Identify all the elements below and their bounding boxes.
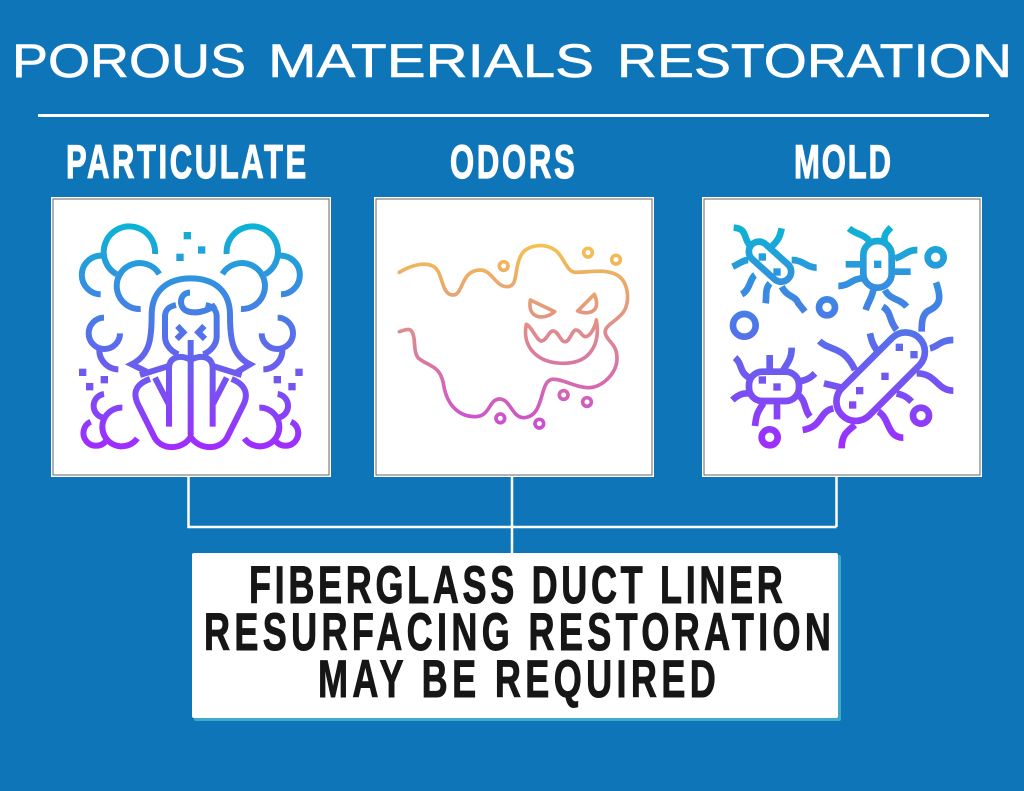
title: RESTORATION: [617, 34, 1012, 87]
callout text: RESURFACING RESTORATION: [204, 602, 831, 662]
icon: person in dust clouds: [79, 226, 303, 447]
callout text: MAY BE REQUIRED: [318, 649, 716, 709]
icon: mold bacteria: [732, 227, 953, 448]
callout text: [204, 555, 831, 709]
heading: odors: ODORS: [450, 137, 575, 189]
panel: particulate: [51, 197, 331, 477]
panel: mold: [702, 197, 982, 477]
panel: odors: [374, 197, 654, 477]
title: POROUS: [12, 34, 246, 87]
icon: odor cloud with face: [399, 246, 628, 428]
callout: fiberglass duct liner: [192, 553, 841, 721]
heading: particulate: PARTICULATE: [66, 137, 306, 189]
callout text: FIBERGLASS DUCT LINER: [249, 555, 783, 615]
heading: mold: MOLD: [794, 137, 891, 189]
connector lines: [188, 476, 836, 553]
title: [12, 34, 1012, 87]
title: MATERIALS: [268, 34, 594, 87]
